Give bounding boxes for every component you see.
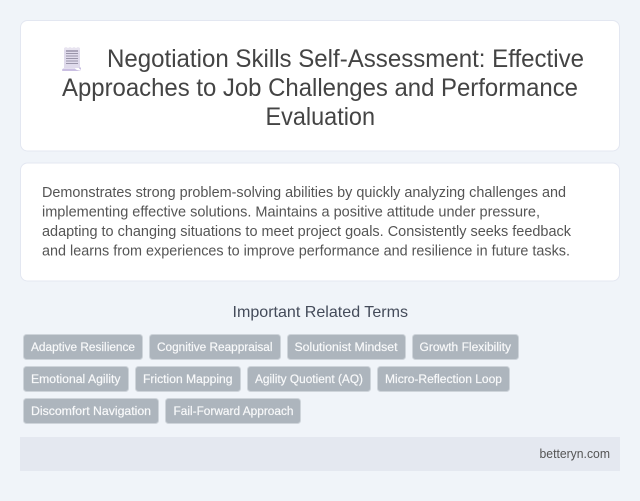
footer text: betteryn.com — [540, 446, 610, 461]
tag: Emotional Agility: Emotional Agility — [31, 372, 121, 386]
tag: Micro-Reflection Loop: Micro-Reflection Loop — [385, 372, 502, 386]
footer bar — [20, 437, 620, 471]
title: Evaluation — [266, 103, 375, 131]
tag: Solutionist Mindset: Solutionist Mindset — [294, 340, 398, 354]
tag: Discomfort Navigation: Discomfort Navigation — [31, 404, 151, 418]
tag: Friction Mapping — [136, 366, 240, 392]
tag: Micro-Reflection Loop — [378, 366, 510, 392]
description text: and learns from experiences to improve performance and resilience in future tasks. — [42, 244, 570, 260]
title: Approaches to Job Challenges and Performance — [62, 74, 578, 102]
description text: Demonstrates strong problem-solving abilities by quickly analyzing challenges and — [42, 185, 566, 201]
title — [62, 45, 584, 131]
tag: Fail-Forward Approach — [166, 398, 300, 424]
icon: document scroll — [62, 47, 81, 71]
tag: Adaptive Resilience — [24, 334, 142, 360]
panel: title card — [20, 20, 620, 151]
tag: Growth Flexibility — [412, 334, 518, 360]
tag: Cognitive Reappraisal: Cognitive Reappraisal — [157, 340, 272, 354]
tag: Adaptive Resilience: Adaptive Resilience — [31, 340, 135, 354]
tag: Cognitive Reappraisal — [150, 334, 280, 360]
tag: Solutionist Mindset — [288, 334, 406, 360]
tag: Emotional Agility — [24, 366, 128, 392]
title: Negotiation Skills Self-Assessment: Effective — [107, 45, 584, 73]
description text: adapting to changing situations to meet project goals. Consistently seeks feedback — [42, 224, 572, 240]
heading: related terms: Important Related Terms — [232, 304, 408, 321]
tag: Fail-Forward Approach: Fail-Forward Approach — [174, 404, 294, 418]
tags: related terms — [24, 334, 518, 424]
tag: Agility Quotient (AQ): Agility Quotient (AQ) — [255, 372, 363, 386]
description text: implementing effective solutions. Maintains a positive attitude under pressure, — [42, 204, 540, 220]
description text — [42, 185, 572, 260]
tag: Growth Flexibility: Growth Flexibility — [420, 340, 512, 354]
tag: Friction Mapping: Friction Mapping — [143, 372, 233, 386]
panel: description card — [20, 163, 620, 281]
tag: Discomfort Navigation — [24, 398, 158, 424]
tag: Agility Quotient (AQ) — [248, 366, 370, 392]
